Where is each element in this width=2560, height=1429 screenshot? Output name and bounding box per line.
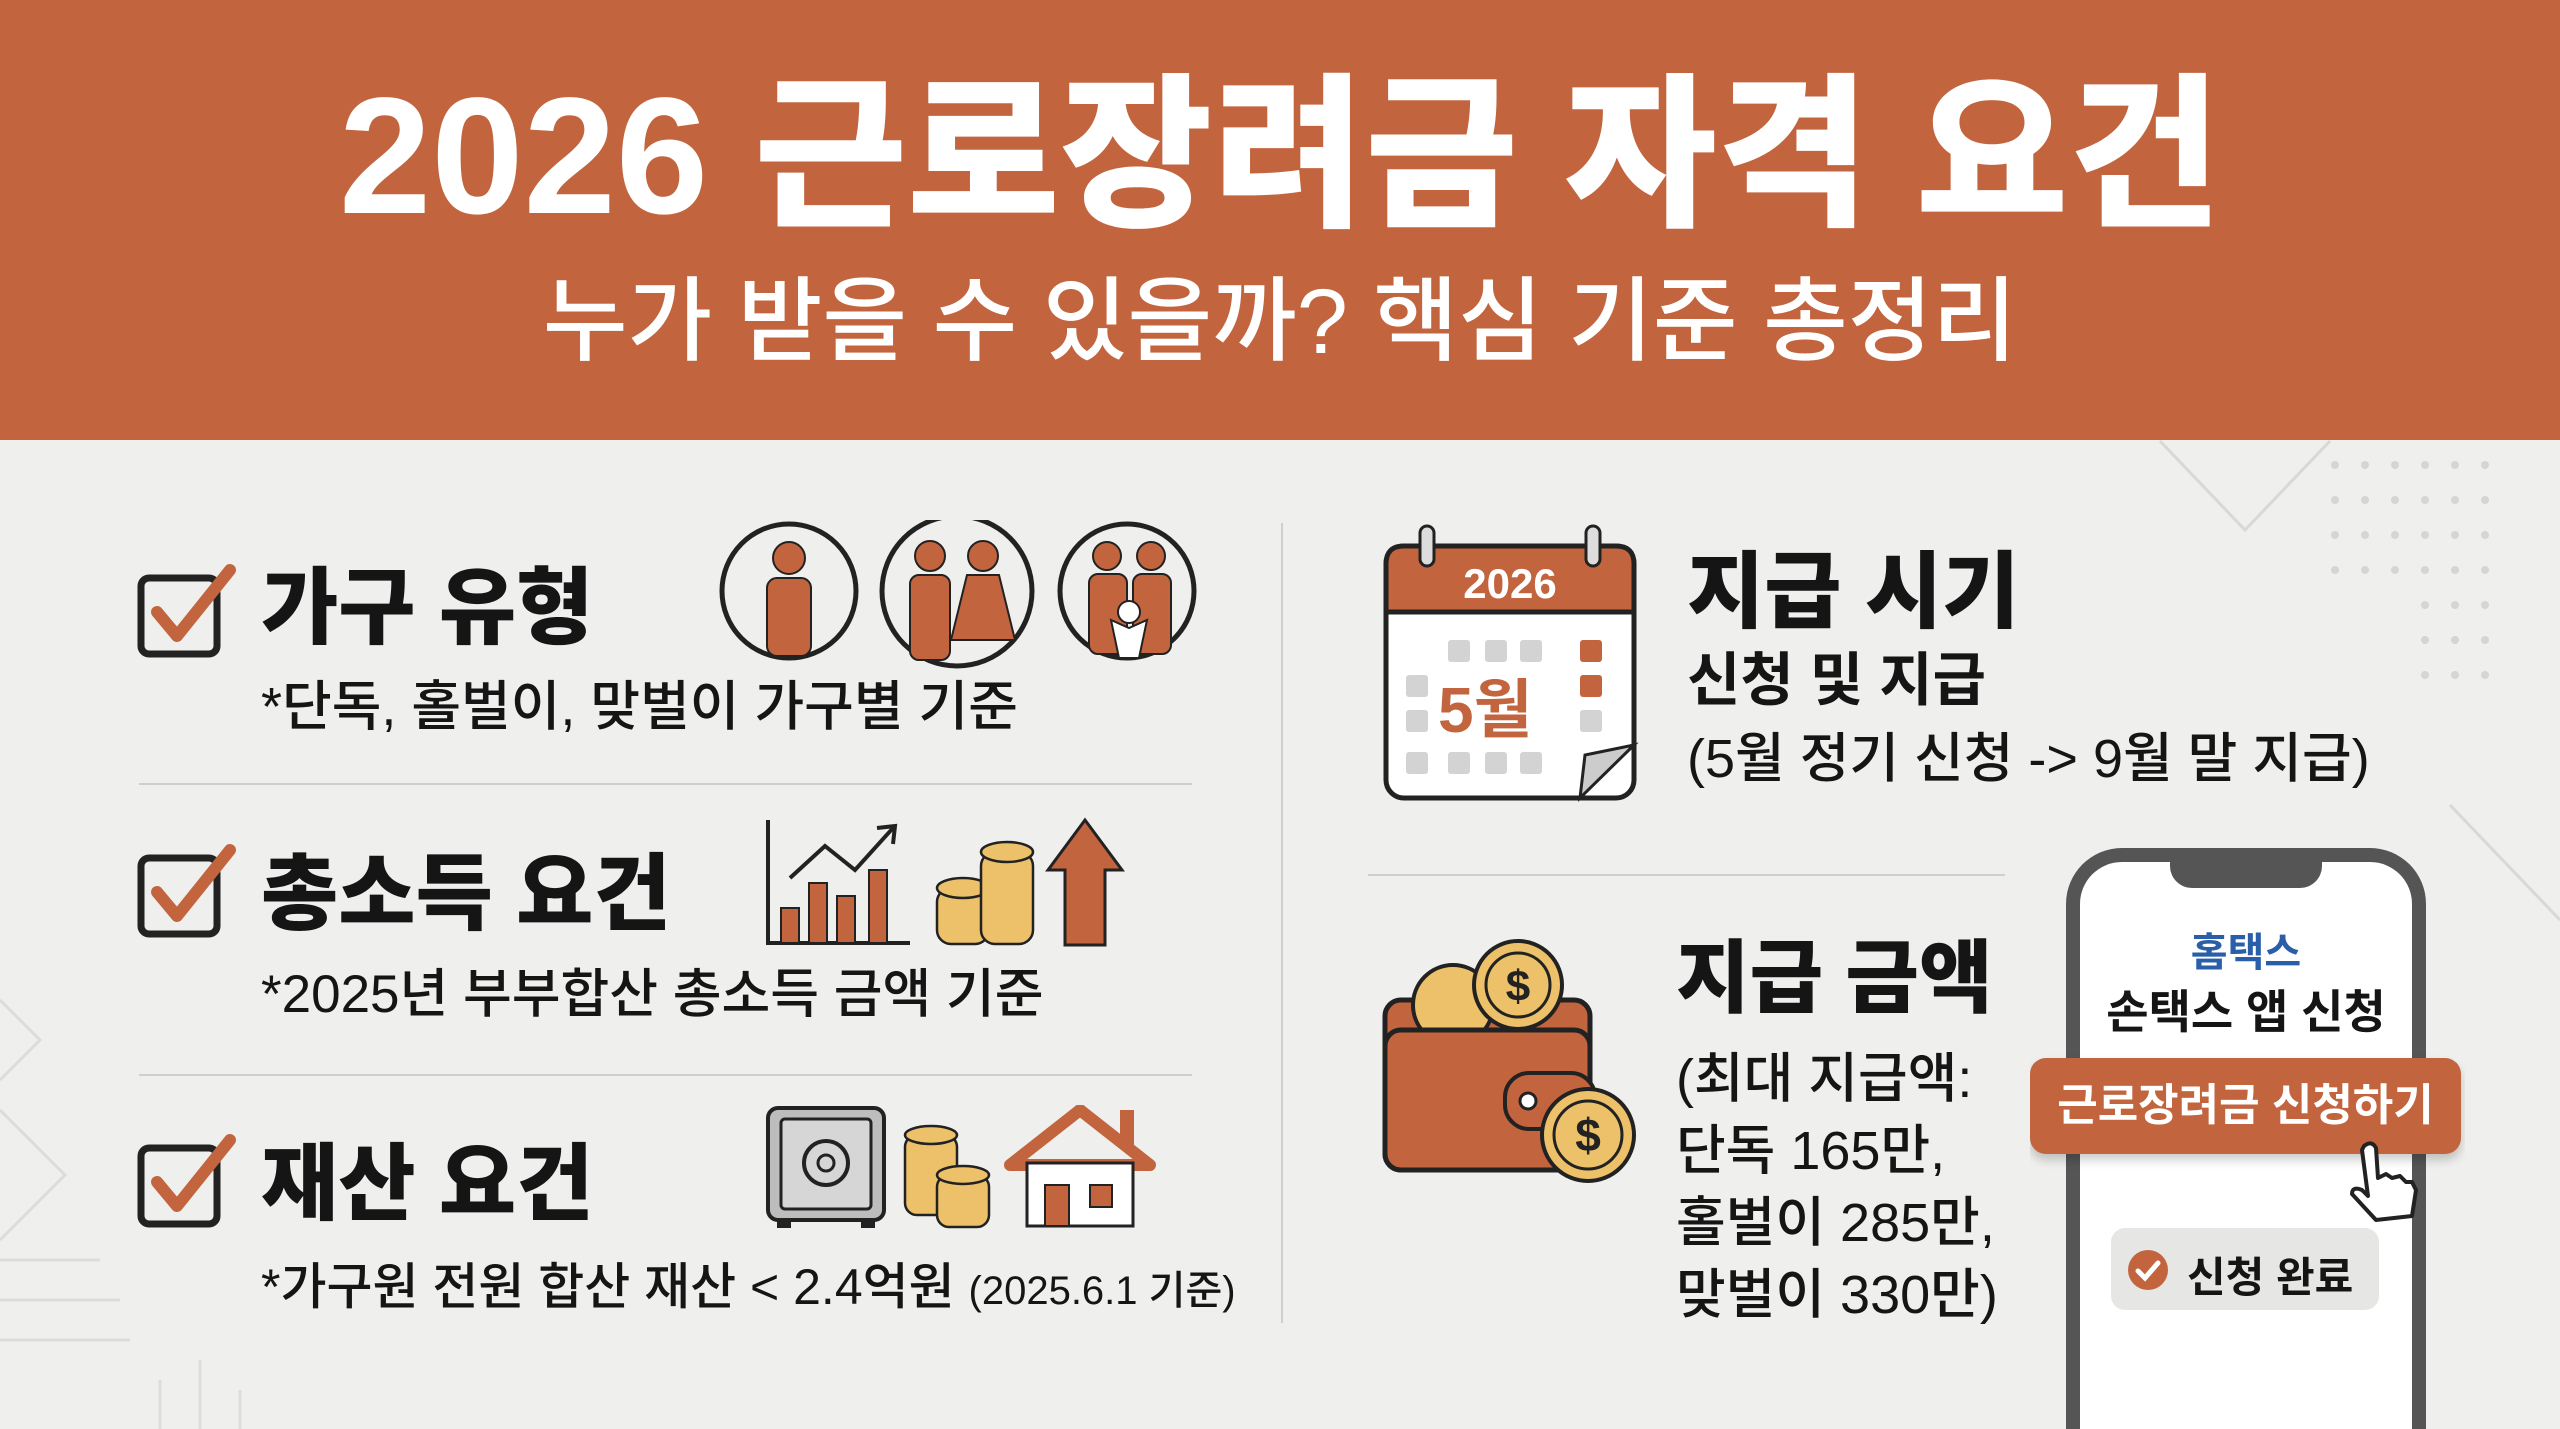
text: apply and pay: 신청 및 지급 (1687, 648, 1986, 713)
icon: calendar: 5월 (1438, 674, 1532, 746)
text: sontax app: 손택스 앱 신청 (2106, 986, 2386, 1038)
icon: checkbox (138, 844, 236, 938)
icon: calendar: 2026 (1463, 560, 1557, 607)
text: *2025년 부부합산 총소득 금액 기준 (261, 965, 1044, 1024)
icon: check (2128, 1250, 2168, 1290)
heading: 총소득 요건 (261, 847, 671, 941)
text: schedule: (5월 정기 신청 -> 9월 말 지급) (1687, 729, 2370, 789)
heading: 재산 요건 (261, 1137, 593, 1231)
text: amounts: 홀벌이 285만, (1676, 1193, 1995, 1253)
text: hometax: 홈택스 (2191, 931, 2301, 975)
text: amounts (1676, 1049, 1998, 1325)
panel: payment amount (1382, 934, 1998, 1325)
icons: safe, coins, house (766, 1105, 1156, 1228)
text: amounts: (최대 지급액: (1676, 1049, 1972, 1109)
icons: people (720, 520, 1196, 668)
header banner (0, 0, 2560, 440)
panel: payment timing (1384, 524, 2370, 802)
notch (2170, 858, 2322, 888)
heading: 지급 금액 (1676, 934, 1993, 1023)
text: amounts: 맞벌이 330만) (1676, 1265, 1998, 1325)
button: 근로장려금 신청하기 (2057, 1081, 2434, 1130)
icon: hand cursor (2350, 1141, 2418, 1222)
phone body (2066, 848, 2426, 1429)
icon: calendar (1384, 524, 1639, 802)
icon: wallet: $ (1506, 962, 1530, 1011)
text: *가구원 전원 합산 재산 < 2.4억원 (2025.6.1 기준) (261, 1259, 1236, 1315)
icon: checkbox (138, 564, 236, 658)
icon: wallet (1382, 939, 1636, 1183)
text: complete: 신청 완료 (2187, 1254, 2353, 1301)
title: 2026 근로장려금 자격 요건 (339, 64, 2221, 249)
icon: checkbox (138, 1134, 236, 1228)
subtitle: 누가 받을 수 있을까? 핵심 기준 총정리 (543, 271, 2017, 373)
row: property (138, 1105, 1236, 1315)
heading: 가구 유형 (261, 561, 593, 655)
phone mockup (2030, 848, 2465, 1429)
row: total income (138, 818, 1125, 1024)
button (2030, 1058, 2461, 1154)
status pill (2111, 1228, 2379, 1310)
text: amounts: 단독 165만, (1676, 1121, 1945, 1181)
icon: bar chart and coins with arrow (766, 818, 1125, 946)
icon: wallet: $ (1575, 1109, 1601, 1161)
heading: 지급 시기 (1687, 545, 2019, 639)
text: *단독, 홀벌이, 맞벌이 가구별 기준 (261, 677, 1018, 737)
row: household type (138, 520, 1196, 737)
